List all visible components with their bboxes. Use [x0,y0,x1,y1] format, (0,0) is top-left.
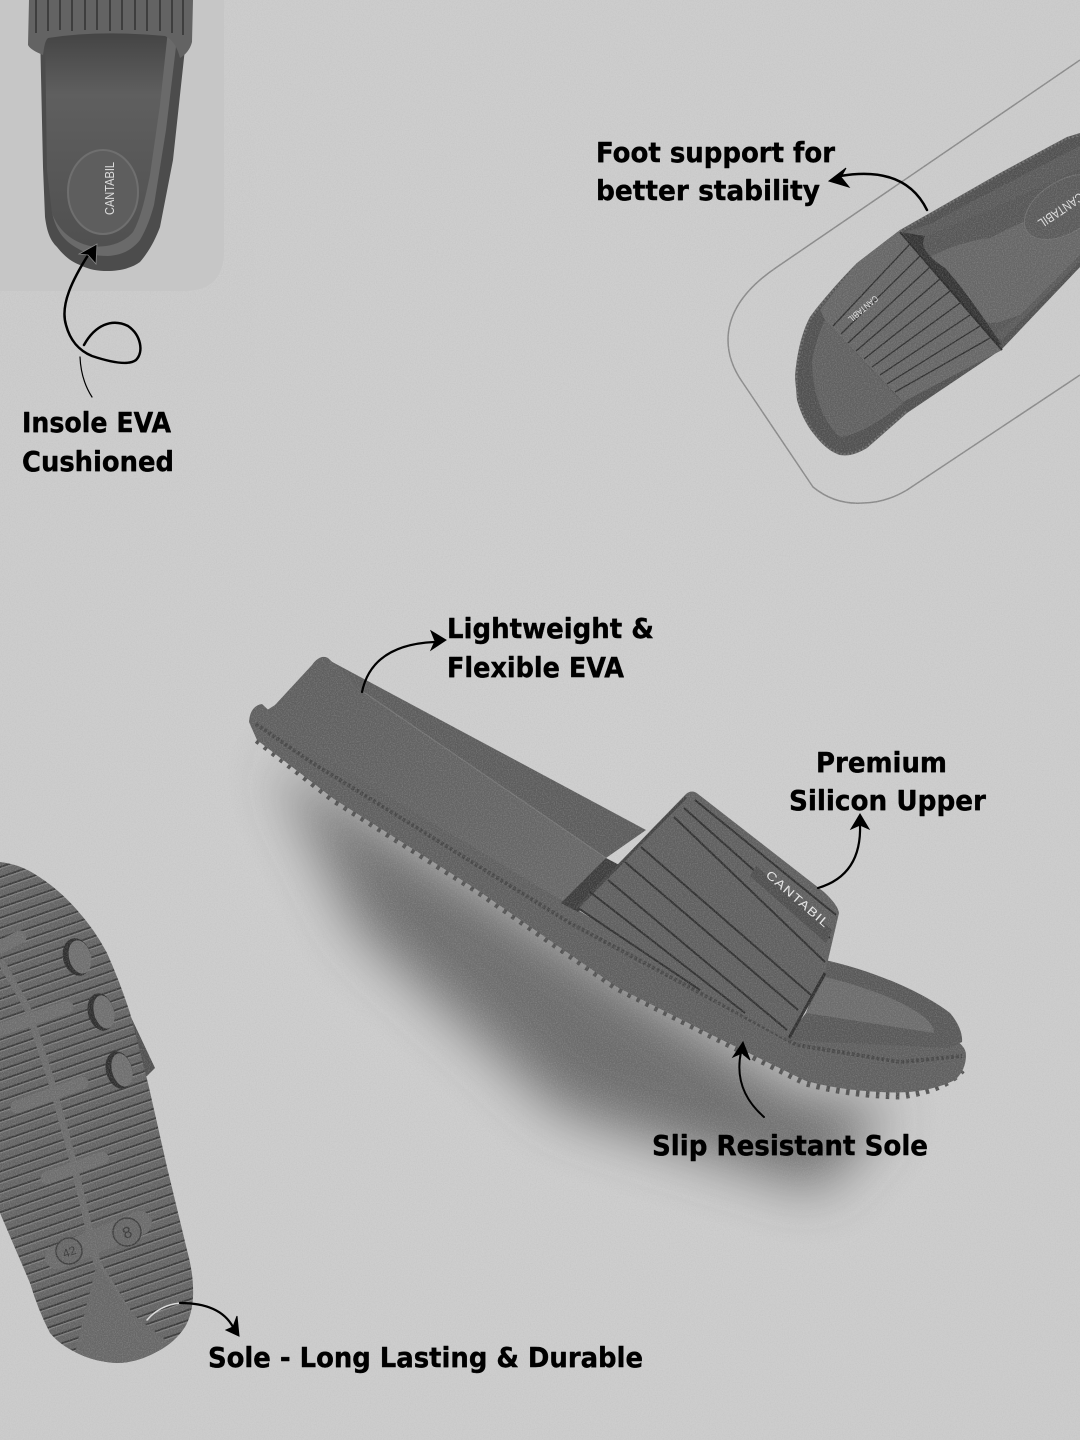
label: flexible: Flexible EVA [447,651,624,684]
studs [59,935,136,1092]
brand text: strap label: CANTABIL [763,868,833,931]
opening shadow [900,232,1002,345]
label: insole: Insole EVA [22,406,171,439]
footbed: front [785,960,962,1048]
heel inner strip [323,657,646,858]
arrow: slip resistant [733,1042,764,1117]
strap: main view [577,792,839,1038]
sandal: insole view from top [28,0,193,271]
sandal: main side view [249,657,966,1096]
label: durable sole: Sole - Long Lasting & Durable [208,1341,643,1374]
arrow: foot support [829,168,927,210]
outsole [249,704,966,1092]
strap: angled view stripes [820,230,1002,402]
label: premium: Premium [816,746,947,779]
sole teeth [257,740,962,1096]
strap: top view stripes [28,0,193,58]
heel outer wall [264,657,606,920]
arrow: insole loop [64,244,140,397]
sandal: angled top view [795,133,1080,455]
size mark: 8: 8 [120,1224,135,1243]
panel: insole photo backdrop [0,0,224,291]
label: slip resistant: Slip Resistant Sole [652,1129,928,1162]
arrow: durable sole [147,1303,239,1336]
label: cushioned: Cushioned [22,445,174,478]
outline: rounded rectangle around top sandal [728,60,1080,503]
strap slot [561,858,625,912]
brand text: insole: CANTABIL [102,162,117,215]
label: foot support: Foot support for [596,136,835,169]
arrow: lightweight [362,631,446,692]
sole ridge [256,724,962,1062]
brand text: strap label: CANTABIL [846,293,880,324]
sandal: outsole view [0,862,194,1363]
label: better stability: better stability [596,174,820,207]
shadow: under main sandal [275,760,890,1190]
label: lightweight: Lightweight & [447,612,654,645]
label: silicon upper: Silicon Upper [789,784,986,817]
toe footbed [812,320,903,437]
arrow: silicon upper [818,814,869,888]
size mark: 42: 42 [61,1243,78,1261]
